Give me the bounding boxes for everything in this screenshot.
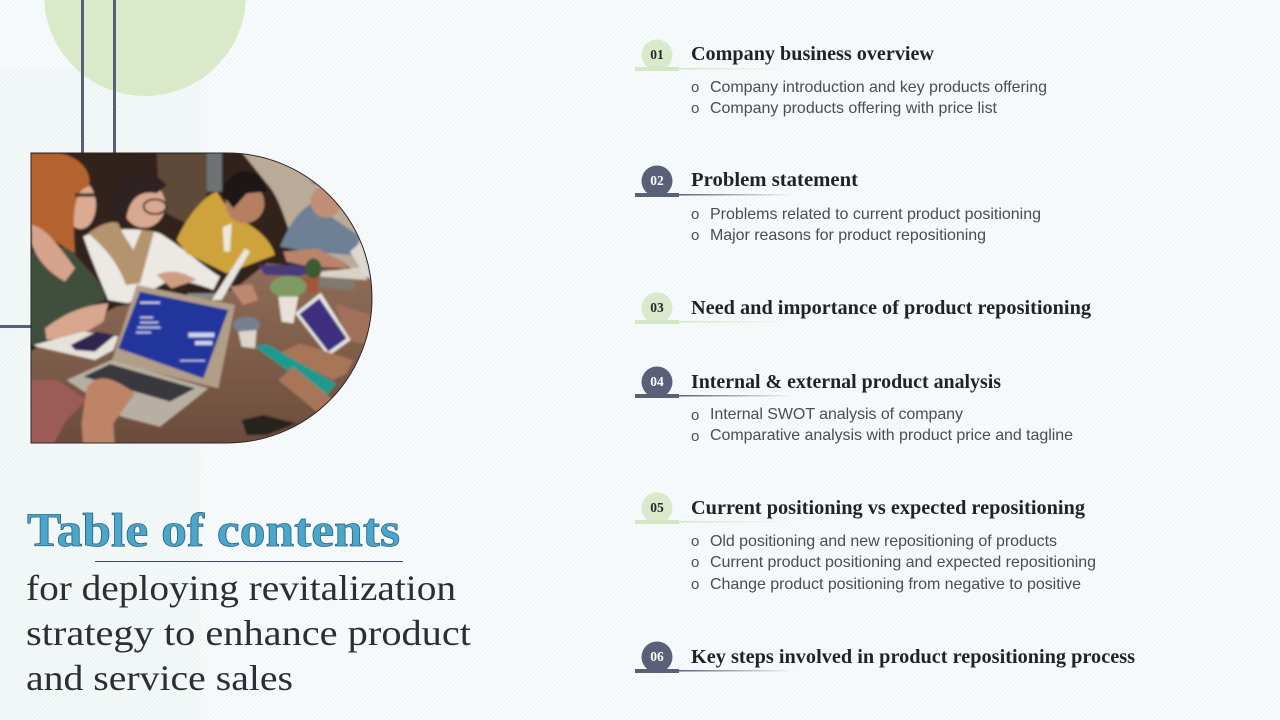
item 06: Key steps involved in product repositioning process: 06	[650, 649, 664, 664]
item 01: Company business overview: Company business overview	[691, 43, 935, 65]
item 05: Current positioning vs expected repositioning: Current positioning vs expected repositioning	[691, 497, 1085, 519]
item 02: Problem statement: o	[691, 206, 699, 223]
subtitle: for deploying revitalization	[26, 568, 456, 608]
item 02: Problem statement: o	[691, 227, 699, 244]
item 05: Current positioning vs expected repositioning: Current product positioning and expected repositioning	[710, 554, 1096, 571]
title: Table of contents: Table of contents	[27, 504, 400, 557]
item 01: Company business overview: 01	[650, 47, 664, 62]
item 02: Problem statement: 02	[650, 173, 664, 188]
item 02: Problem statement: Problems related to current product positioning	[710, 206, 1041, 223]
item 02: Problem statement: Problem statement	[691, 169, 858, 191]
item 06: Key steps involved in product repositioning process: Key steps involved in product repositioning process	[691, 646, 1135, 668]
typing hands	[32, 379, 86, 442]
item 01: Company business overview: o	[691, 100, 699, 117]
item 03: Need and importance of product repositioning	[635, 292, 1091, 324]
table items: tablets, books and plants	[258, 265, 328, 276]
subtitle: strategy to enhance product	[26, 613, 471, 653]
item 05: Current positioning vs expected repositioning: Change product positioning from negative to positive	[710, 576, 1081, 593]
item 05: Current positioning vs expected repositioning: o	[691, 576, 699, 593]
item 05: Current positioning vs expected repositioning	[635, 492, 1096, 593]
item 03: Need and importance of product repositioning: 03	[650, 300, 664, 315]
horizontal connector line	[0, 325, 32, 328]
left notebook and phone	[33, 332, 118, 360]
item 04: Internal and external product analysis: Internal SWOT analysis of company	[710, 406, 963, 423]
item 04: Internal and external product analysis: 04	[650, 374, 664, 389]
item 04: Internal and external product analysis: Comparative analysis with product price and tagline	[710, 427, 1073, 444]
woman in white shirt	[83, 229, 220, 303]
photo outline	[31, 153, 372, 443]
item 01: Company business overview	[635, 40, 1047, 117]
item 01: Company business overview: o	[691, 79, 699, 96]
item 01: Company business overview: Company products offering with price list	[710, 100, 998, 117]
subtitle	[26, 568, 471, 698]
tablet at right	[335, 304, 370, 344]
item 01: Company business overview: Company introduction and key products offering	[710, 79, 1047, 96]
laptop	[112, 285, 235, 388]
item 05: Current positioning vs expected repositioning: 05	[650, 500, 664, 515]
man in yellow jacket	[177, 192, 275, 273]
item 06: Key steps involved in product repositioning process	[635, 642, 1135, 673]
item 05: Current positioning vs expected repositioning: o	[691, 533, 699, 550]
item 05: Current positioning vs expected repositioning: o	[691, 554, 699, 571]
item 05: Current positioning vs expected repositioning: Old positioning and new repositioning of products	[710, 533, 1057, 550]
item 03: Need and importance of product repositioning: Need and importance of product repositioning	[691, 297, 1091, 319]
item 04: Internal and external product analysis: o	[691, 428, 699, 445]
vertical connector lines	[81, 0, 116, 154]
teal phone and hands	[278, 343, 353, 380]
subtitle: and service sales	[26, 658, 293, 698]
item 04: Internal and external product analysis	[635, 366, 1073, 445]
item 04: Internal and external product analysis: Internal & external product analysis	[691, 371, 1001, 393]
photo: team meeting around a table with laptops	[32, 154, 372, 442]
item 02: Problem statement	[635, 166, 1041, 244]
item 02: Problem statement: Major reasons for product repositioning	[710, 227, 986, 244]
red-haired woman	[32, 246, 106, 345]
green decorative circle	[44, 0, 246, 96]
man in blue shirt	[280, 203, 360, 255]
title underline	[95, 561, 403, 562]
item 04: Internal and external product analysis: o	[691, 407, 699, 424]
